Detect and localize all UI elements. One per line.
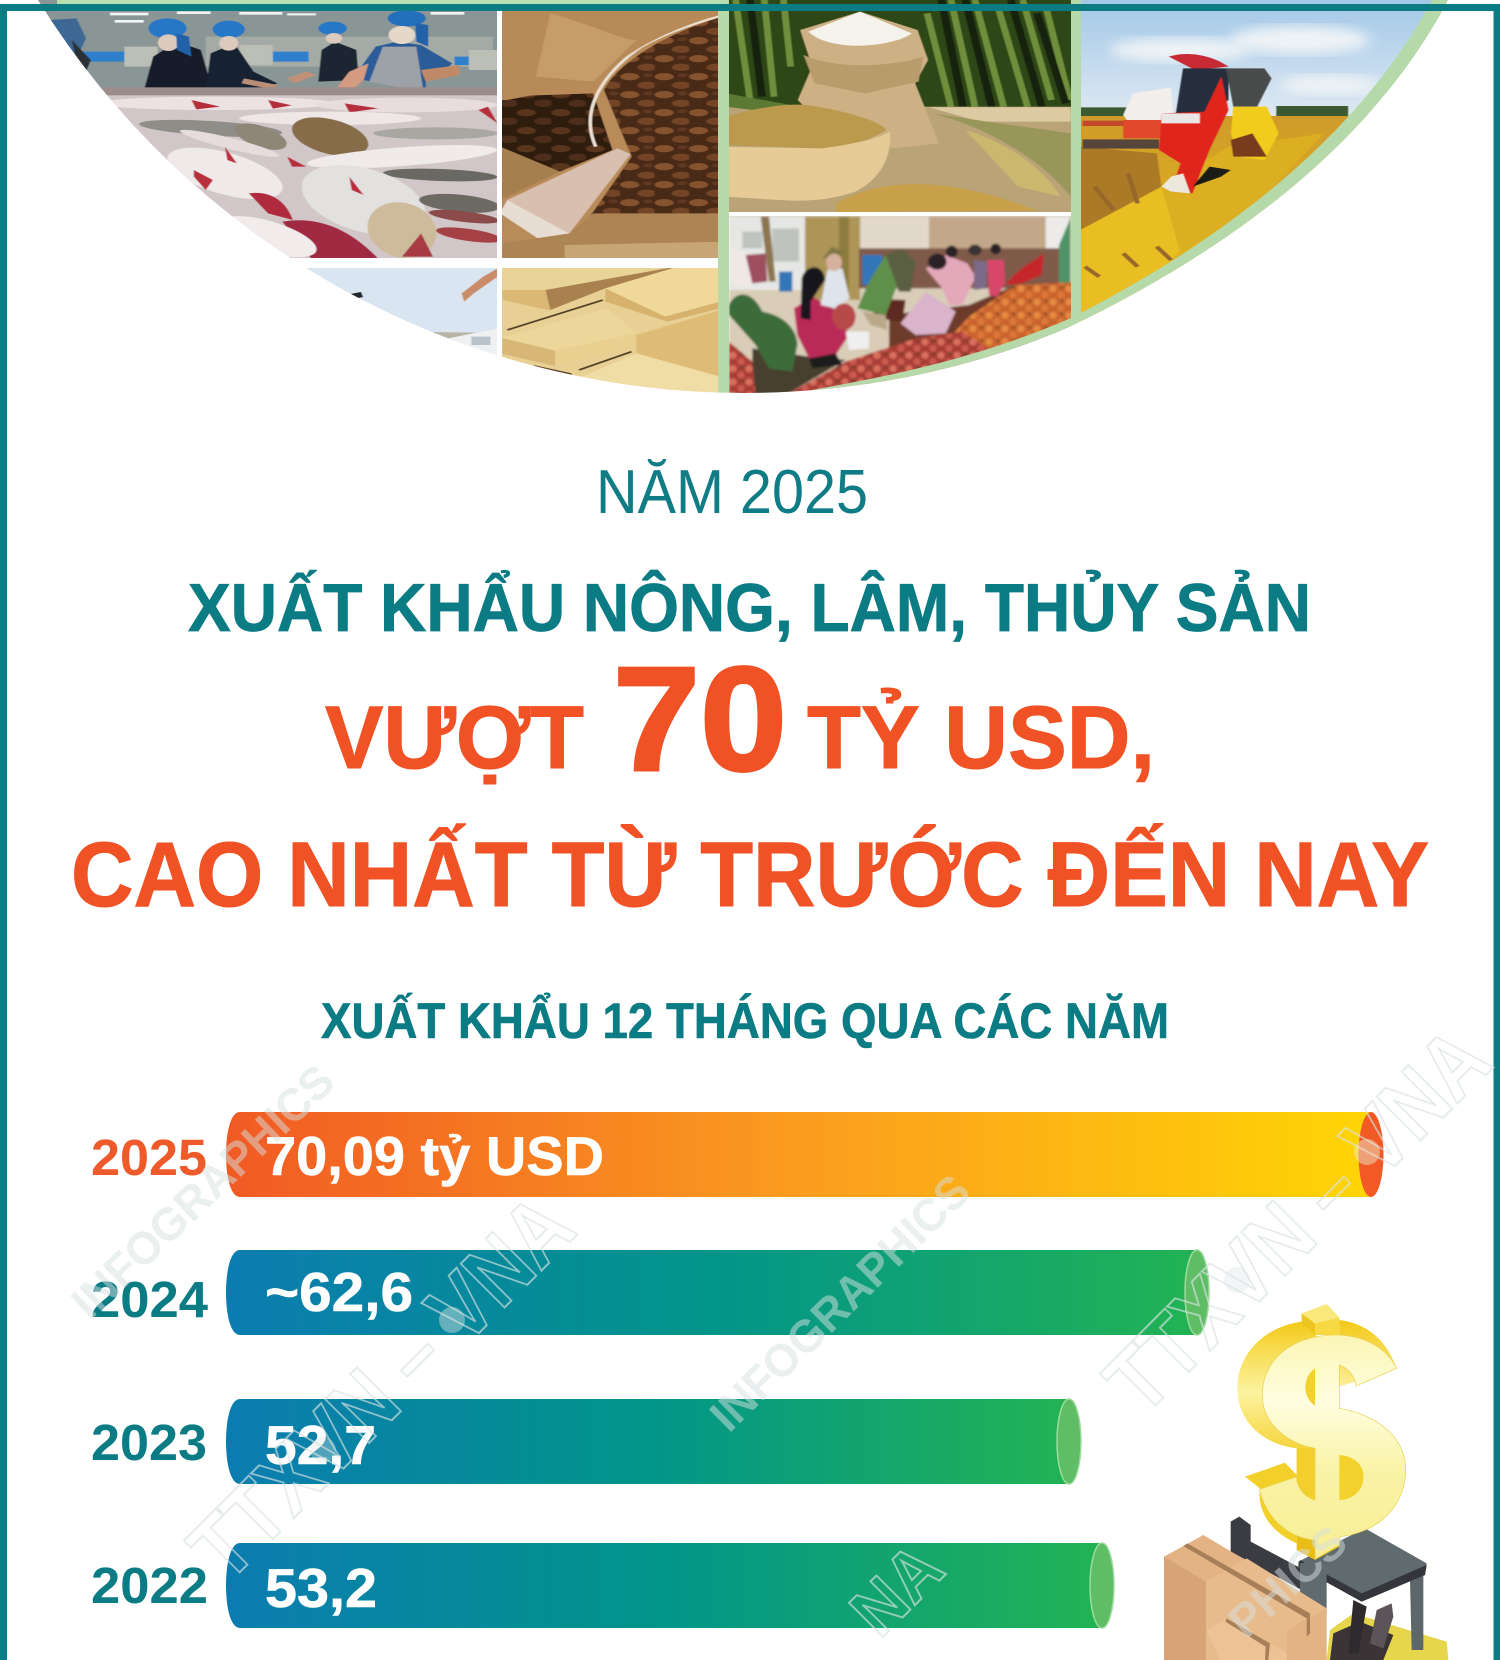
cardboard boxes [1164, 1535, 1327, 1660]
photo: lychee market [729, 215, 1072, 395]
watermark: infographics right: PHICS [1218, 1515, 1357, 1647]
bar 2022: 53,2 [265, 1557, 377, 1619]
photo: packaging [306, 268, 497, 356]
watermark: infographics left: INFOGRAPHICS [61, 1054, 344, 1328]
watermark: infographics centre: INFOGRAPHICS [700, 1164, 980, 1441]
bar 2023 [91, 1399, 1081, 1484]
workers [144, 46, 209, 88]
green strip at top edge [57, 0, 727, 4]
chart heading: XUẤT KHẨU 12 THÁNG QUA CÁC NĂM [321, 993, 1169, 1049]
bar 2023: 52,7 [265, 1414, 376, 1476]
photo: fish processing [24, 0, 503, 267]
people [729, 294, 797, 372]
photo: coffee beans [502, 11, 718, 258]
fish table [342, 95, 346, 96]
title: line 2: TỶ USD, [807, 687, 1155, 787]
forklift body [1327, 1613, 1448, 1660]
icon: forklift with dollar [1164, 1304, 1448, 1660]
bar 2022: 2022 [91, 1557, 208, 1614]
lychee pile [888, 286, 1071, 362]
title: line 1: XUẤT KHẨU NÔNG, LÂM, THỦY SẢN [188, 569, 1311, 646]
watermark: TTXVN bottom: NA [835, 1528, 958, 1651]
bar 2025 [91, 1112, 1384, 1197]
title: line 2: VƯỢT [325, 687, 584, 787]
bar 2025: 2025 [91, 1129, 207, 1186]
bar 2023: 2023 [91, 1414, 207, 1471]
photo: timber [500, 265, 720, 398]
bar 2024: ~62,6 [265, 1261, 413, 1323]
heading: year: NĂM 2025 [596, 458, 868, 527]
panel: photo collage [24, 0, 1500, 400]
title: line 2 [325, 637, 1155, 802]
green divider: between rice and harvester [1071, 0, 1081, 340]
green arc band [809, 0, 1448, 390]
photo: combine harvester [1080, 0, 1461, 340]
bar 2024: 2024 [91, 1271, 209, 1328]
mast [1231, 1517, 1320, 1600]
bar 2024 [91, 1250, 1209, 1335]
gold dollar sign [1237, 1304, 1406, 1560]
watermarks [61, 1009, 1500, 1651]
bar chart [91, 1112, 1384, 1628]
photo: rice sack [726, 0, 1075, 213]
bar 2022 [91, 1543, 1114, 1628]
overhead guard [1298, 1528, 1427, 1602]
bar 2025: 70,09 tỷ USD [265, 1125, 604, 1187]
title: line 3: CAO NHẤT TỪ TRƯỚC ĐẾN NAY [71, 823, 1429, 926]
green divider: between timber and rice [718, 0, 729, 400]
title: line 2: 70 [613, 637, 787, 802]
watermark: TTXVN left: TTXVN – VNA [170, 1176, 593, 1599]
